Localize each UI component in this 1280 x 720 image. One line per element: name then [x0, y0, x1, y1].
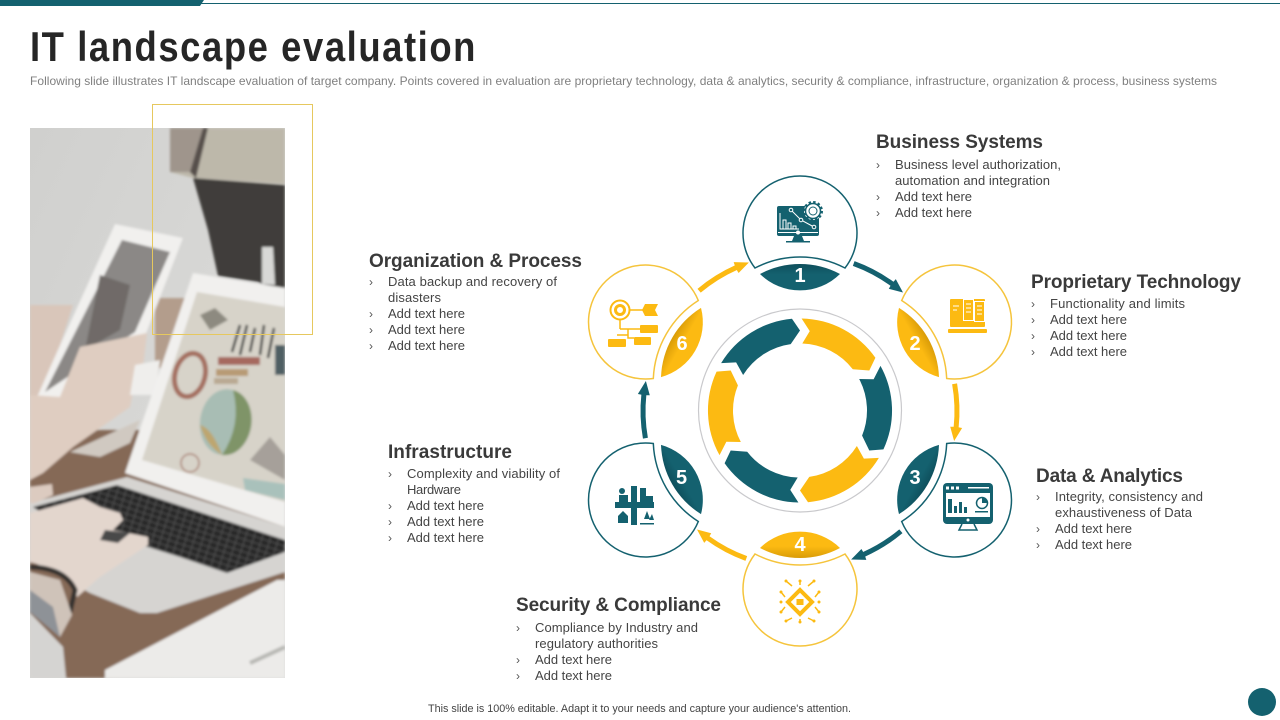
text block: proprietary technology [1031, 272, 1241, 359]
text block: business systems: › [876, 190, 880, 204]
text block: organization and process: › [369, 323, 373, 337]
text block: infrastructure: › [388, 515, 392, 529]
text block: organization and process [369, 251, 582, 353]
text block: infrastructure: › [388, 499, 392, 513]
text block: proprietary technology: › [1031, 297, 1035, 311]
text block: data and analytics: Integrity, consistency and [1055, 489, 1203, 504]
node 1: business systems [743, 176, 857, 290]
text block: infrastructure: Add text here [407, 498, 484, 513]
text block: security and compliance: Security & Compliance [516, 595, 721, 616]
node 6: organization and process [568, 244, 724, 400]
text block: business systems: Business Systems [876, 132, 1043, 153]
icon: secure chip [780, 580, 820, 624]
text block: business systems: Add text here [895, 189, 972, 204]
icon: city cross [615, 486, 654, 525]
node 4: security and compliance [743, 532, 857, 646]
text block: data and analytics: › [1036, 538, 1040, 552]
text block: security and compliance [516, 595, 721, 683]
node 2: proprietary technology: 2 [909, 333, 921, 355]
yellow accent frame [152, 104, 312, 334]
arrow: step 5 to 6 [621, 381, 671, 438]
node 5: infrastructure [568, 422, 724, 578]
icon: monitor with gear [777, 202, 822, 242]
icon: laptop with documents [948, 299, 987, 333]
arrow: step 2 to 3 [929, 384, 979, 441]
text block: proprietary technology: › [1031, 313, 1035, 327]
text block: proprietary technology: Functionality and limits [1050, 296, 1186, 311]
icon: target and org tree [608, 300, 658, 347]
text block: business systems: Add text here [895, 205, 972, 220]
node 6: organization and process: 6 [676, 333, 688, 355]
text block: security and compliance: › [516, 669, 520, 683]
text block: data and analytics [1036, 466, 1203, 552]
text block: data and analytics: Data & Analytics [1036, 466, 1183, 487]
text block: organization and process: › [369, 275, 373, 289]
text block: data and analytics: › [1036, 490, 1040, 504]
text block: organization and process: Add text here [388, 322, 465, 337]
arrow: step 3 to 4 [851, 517, 901, 574]
text block: infrastructure: Add text here [407, 514, 484, 529]
text block: infrastructure: Hardware [407, 482, 461, 497]
title: IT landscape evaluation [30, 23, 477, 70]
text block: organization and process: Add text here [388, 306, 465, 321]
icon: dashboard monitor [943, 483, 993, 530]
text block: organization and process: Data backup and recovery of [388, 274, 557, 289]
page badge [1248, 688, 1276, 716]
text block: proprietary technology: › [1031, 329, 1035, 343]
text block: security and compliance: Add text here [535, 652, 612, 667]
text block: organization and process: Add text here [388, 338, 465, 353]
text block: data and analytics: Add text here [1055, 537, 1132, 552]
text block: security and compliance: Add text here [535, 668, 612, 683]
text block: business systems [876, 132, 1061, 220]
text block: organization and process: disasters [388, 290, 442, 305]
text block: data and analytics: exhaustiveness of Data [1055, 505, 1193, 520]
arrow: step 1 to 2 [854, 264, 903, 292]
text block: data and analytics: Add text here [1055, 521, 1132, 536]
arrow: step 6 to 1 [699, 248, 749, 305]
photo: hands using laptop and tablet [30, 128, 285, 678]
text block: organization and process: › [369, 339, 373, 353]
text block: data and analytics: › [1036, 522, 1040, 536]
subtitle: Following slide illustrates IT landscape evaluation of target company. Points covered in evaluation are proprietary technology, data & analytics, security & compliance, infrastructure, organization & process, business systems [30, 74, 1217, 88]
top accent bar [0, 0, 1280, 6]
text block: proprietary technology: Add text here [1050, 328, 1127, 343]
text block: proprietary technology: Add text here [1050, 344, 1127, 359]
text block: infrastructure [388, 442, 560, 545]
text block: business systems: automation and integration [895, 173, 1050, 188]
text block: infrastructure: Infrastructure [388, 442, 512, 463]
text block: business systems: › [876, 158, 880, 172]
text block: proprietary technology: Proprietary Technology [1031, 272, 1241, 293]
node 3: data and analytics: 3 [909, 467, 921, 489]
text block: infrastructure: Add text here [407, 530, 484, 545]
node 5: infrastructure: 5 [676, 467, 687, 489]
text block: organization and process: Organization & Process [369, 251, 582, 272]
arrow: step 4 to 5 [697, 530, 746, 558]
text block: infrastructure: › [388, 467, 392, 481]
text block: organization and process: › [369, 307, 373, 321]
text block: business systems: Business level authorization, [895, 157, 1061, 172]
text block: infrastructure: Complexity and viability of [407, 466, 560, 481]
text block: security and compliance: › [516, 621, 520, 635]
text block: infrastructure: › [388, 531, 392, 545]
node 2: proprietary technology [876, 244, 1032, 400]
node 4: security and compliance: 4 [794, 534, 806, 556]
node 1: business systems: 1 [794, 265, 806, 287]
central ring of six chevrons [683, 299, 917, 522]
node 3: data and analytics [876, 422, 1032, 578]
text block: security and compliance: › [516, 653, 520, 667]
text block: security and compliance: regulatory authorities [535, 636, 658, 651]
text block: proprietary technology: › [1031, 345, 1035, 359]
text block: business systems: › [876, 206, 880, 220]
footer note: This slide is 100% editable. Adapt it to your needs and capture your audience's attention. [428, 703, 851, 715]
text block: security and compliance: Compliance by Industry and [535, 620, 698, 635]
text block: proprietary technology: Add text here [1050, 312, 1127, 327]
